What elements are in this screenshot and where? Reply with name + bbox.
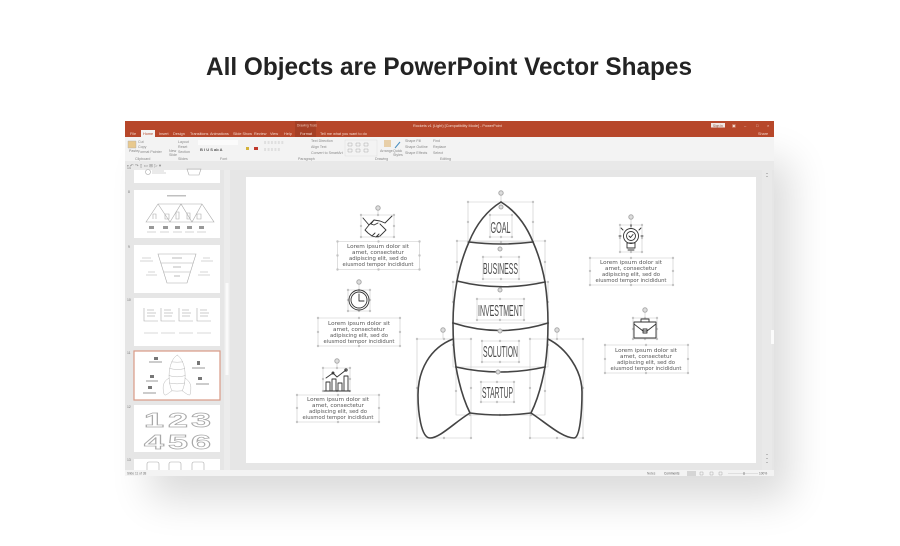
thumbnail: selected rocket slide <box>134 351 220 400</box>
callout: light bulb <box>590 215 673 285</box>
ribbon tabs: Review <box>254 132 267 136</box>
body text: adipiscing elit, sed do <box>330 333 388 339</box>
slide canvas: GOAL <box>490 220 511 237</box>
thumbnail numbers <box>127 166 131 462</box>
body text: adipiscing elit, sed do <box>309 409 367 415</box>
ribbon tabs: Format <box>300 132 313 136</box>
text frame <box>590 258 673 285</box>
drawing controls: Shape Effects <box>405 151 428 155</box>
paragraph controls: Paragraph <box>298 157 315 161</box>
drawing controls: Quick <box>393 149 402 153</box>
paragraph controls: Align Text <box>311 145 327 149</box>
paragraph controls: Text Direction <box>311 139 333 143</box>
callout: clock <box>318 280 400 346</box>
ribbon tabs: View <box>270 132 278 136</box>
body text: Lorem ipsum dolor sit <box>307 397 369 403</box>
body text <box>342 244 414 268</box>
ribbon tabs: Animations <box>210 132 229 136</box>
ribbon: Layout <box>178 140 189 144</box>
ribbon tabs: Home <box>143 132 153 136</box>
thumbnail: four columns <box>134 298 220 346</box>
thumbnail: numbers 1 to 6: 2 <box>168 410 188 432</box>
thumbnail: numbers 1 to 6: 3 <box>191 410 211 432</box>
thumbnail numbers: 11 <box>127 351 131 355</box>
slide canvas: SOLUTION <box>483 344 518 361</box>
status bar: Notes <box>647 472 656 476</box>
font controls <box>198 140 258 161</box>
body text: adipiscing elit, sed do <box>602 272 660 278</box>
ribbon tabs: File <box>130 132 136 136</box>
ribbon tabs: Help <box>284 132 292 136</box>
title bar <box>125 121 774 137</box>
thumbnail scrollbar <box>224 170 230 470</box>
quick access toolbar <box>125 161 774 170</box>
body text: Lorem ipsum dolor sit <box>600 260 662 266</box>
ribbon tabs <box>130 130 367 137</box>
body text: amet, consectetur <box>312 403 365 409</box>
body text <box>324 321 394 345</box>
title bar: – <box>744 123 747 128</box>
title bar: ▣ <box>732 123 736 128</box>
title bar: Share <box>758 132 768 136</box>
status bar: Comments <box>664 472 680 476</box>
slide canvas: STARTUP <box>482 385 513 402</box>
thumbnail: numbers 1 to 6: 5 <box>168 432 188 454</box>
rocket outline <box>418 202 582 438</box>
PowerPoint window <box>125 121 774 476</box>
title bar: × <box>767 123 770 128</box>
ribbon: Cut <box>138 140 144 144</box>
thumbnail numbers: 8 <box>128 190 130 194</box>
ribbon tabs: Design <box>173 132 185 136</box>
thumbnail numbers: 12 <box>127 405 131 409</box>
drawing controls <box>345 139 451 161</box>
body text: amet, consectetur <box>620 354 673 360</box>
body text: Lorem ipsum dolor sit <box>615 348 677 354</box>
ribbon: Section <box>178 150 190 154</box>
drawing controls: Arrange <box>380 149 393 153</box>
ribbon: Format Painter <box>138 150 163 154</box>
thumbnail: funnel <box>134 245 220 293</box>
thumbnail: numbers 1 to 6 <box>134 405 220 454</box>
ribbon: Reset <box>178 145 187 149</box>
slide thumbnail panel <box>125 166 227 470</box>
slide canvas: INVESTMENT <box>478 303 523 320</box>
body text: Lorem ipsum dolor sit <box>328 321 390 327</box>
body text: amet, consectetur <box>605 266 658 272</box>
title bar: Drawing Tools <box>297 124 317 128</box>
rocket label frames <box>477 215 524 402</box>
ribbon tabs: Slide Show <box>233 132 252 136</box>
icon: chart <box>323 359 350 391</box>
paragraph controls: Convert to SmartArt <box>311 151 343 155</box>
body text <box>302 397 374 421</box>
rocket selection frames <box>417 194 583 438</box>
body text: eiusmod tempor incididunt <box>342 262 414 268</box>
title: All Objects are PowerPoint Vector Shapes <box>206 53 692 81</box>
callout: handshake <box>338 206 420 270</box>
status bar: 100% <box>759 472 767 476</box>
callout: briefcase <box>605 308 688 373</box>
paste button <box>128 141 136 148</box>
body text: Lorem ipsum dolor sit <box>347 244 409 250</box>
ribbon: Copy <box>138 145 147 149</box>
body text: eiusmod tempor incididunt <box>324 339 394 345</box>
ribbon <box>125 137 774 162</box>
thumbnail numbers: 10 <box>127 298 131 302</box>
callout: growth chart <box>297 359 379 422</box>
body text: eiusmod tempor incididunt <box>302 415 374 421</box>
text frame <box>318 318 400 346</box>
drawing controls: Select <box>433 151 443 155</box>
thumbnail: numbers 1 to 6: 4 <box>144 432 166 454</box>
thumbnail: numbers 1 to 6: 6 <box>191 432 211 454</box>
title bar: □ <box>756 123 759 128</box>
drawing controls: Shape Fill <box>405 139 421 143</box>
ribbon: Clipboard <box>135 157 150 161</box>
ribbon: Slides <box>178 157 188 161</box>
ribbon: Paste <box>129 149 138 153</box>
body text: eiusmod tempor incididunt <box>610 366 682 372</box>
right scrollbar <box>762 170 774 470</box>
drawing controls: Styles <box>393 153 403 157</box>
drawing controls: Drawing <box>375 157 388 161</box>
thumbnail: numbers 1 to 6: 1 <box>144 410 164 432</box>
text frame <box>605 345 688 373</box>
title bar: Rockets v1 (Light) [Compatibility Mode] - PowerPoint <box>413 124 503 128</box>
quick access toolbar: ▪ ↶ ↷ ▯ ▭ ⊞ ▷ ▾ <box>127 163 162 168</box>
ribbon tabs: Tell me what you want to do <box>320 132 367 136</box>
paragraph controls <box>264 139 343 161</box>
text frame <box>297 395 379 422</box>
icon: briefcase <box>633 308 657 339</box>
drawing controls: Find <box>433 139 440 143</box>
paragraph controls: ≡ ≡ ≡ ≡ ≡ ≡ <box>264 140 284 145</box>
body text <box>610 348 682 372</box>
ribbon: Slide <box>169 153 177 157</box>
ribbon tabs: Transitions <box>190 132 209 136</box>
thumbnail: triangles <box>134 190 220 238</box>
icon: light bulb <box>619 215 643 252</box>
rocket <box>418 191 582 438</box>
status bar <box>125 470 774 476</box>
ribbon: New <box>169 149 177 153</box>
thumbnail numbers: 14 <box>127 166 131 170</box>
thumbnail numbers: 13 <box>127 458 131 462</box>
drawing controls: Editing <box>440 157 451 161</box>
slide canvas <box>246 177 756 463</box>
body text: eiusmod tempor incididunt <box>596 278 666 284</box>
thumbnail numbers: 9 <box>128 245 130 249</box>
body text: amet, consectetur <box>352 250 405 256</box>
body text: adipiscing elit, sed do <box>349 256 407 262</box>
font controls: B I U S ab A <box>200 147 223 152</box>
drawing controls: Replace <box>433 145 446 149</box>
window shadow <box>150 160 790 500</box>
text frame <box>338 242 420 270</box>
ribbon tabs: Insert <box>159 132 169 136</box>
body text: adipiscing elit, sed do <box>617 360 675 366</box>
thumbnail: cropped slide <box>134 169 220 183</box>
rotation handles <box>441 191 559 374</box>
thumbnail: cropped bottom slide <box>134 459 220 470</box>
body text: amet, consectetur <box>333 327 386 333</box>
icon: handshake <box>361 206 394 237</box>
icon: clock <box>348 280 370 311</box>
font controls: Font <box>220 157 227 161</box>
drawing controls: Shape Outline <box>405 145 428 149</box>
status bar: Slide 11 of 38 <box>127 472 146 476</box>
title bar: Sign in <box>713 124 723 128</box>
paragraph controls: ≡ ≡ ≡ ≡ ≡ <box>264 147 281 152</box>
slide canvas: BUSINESS <box>483 261 518 278</box>
body text <box>596 260 666 284</box>
